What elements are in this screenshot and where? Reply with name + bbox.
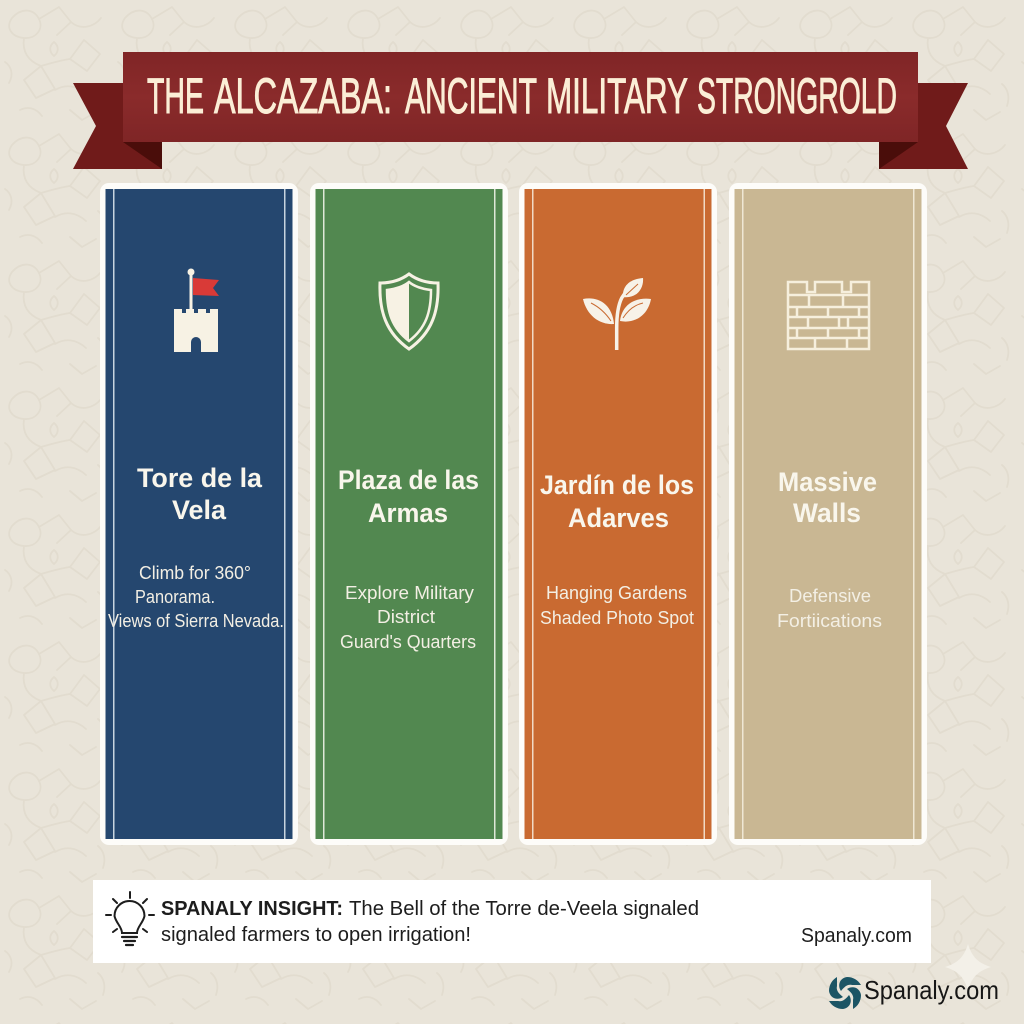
heading: Tore de la Vela: [137, 463, 263, 525]
text: description: Panorama.: [135, 587, 215, 607]
heading: Tore de la Vela: Tore de la: [137, 463, 263, 493]
icon: shield: [380, 274, 438, 349]
title banner: [73, 52, 968, 169]
heading: Jardin de los Adarves: Jardín de los: [540, 470, 694, 500]
text: description: Hanging Gardens: [546, 583, 687, 603]
text: description: District: [377, 607, 435, 627]
icon: logo swirl: [829, 977, 861, 1009]
text: description: [540, 583, 694, 628]
text: insight: signaled farmers to open irrigation!: [161, 924, 471, 946]
left ribbon tail: [73, 83, 162, 169]
heading: Massive Walls: Walls: [793, 498, 861, 528]
text: description: Explore Military: [345, 583, 474, 603]
text: description: [108, 563, 284, 631]
text: description: Views of Sierra Nevada.: [108, 611, 284, 631]
panel: Massive Walls: [729, 183, 927, 845]
heading: Plaza de las Armas: Plaza de las: [338, 465, 479, 495]
panel: Plaza de las Armas: [310, 183, 508, 845]
banner body: [123, 52, 918, 142]
heading: Jardin de los Adarves: [540, 470, 694, 533]
panel: insight callout: [93, 880, 931, 963]
icon: brick wall: [788, 282, 869, 349]
text: description: [340, 583, 476, 652]
icon: castle tower with flag: [174, 268, 219, 352]
icon: sprout with leaves: [583, 278, 651, 350]
text: insight: [161, 898, 699, 946]
text: insight: SPANALY INSIGHT:: [161, 898, 343, 920]
right ribbon tail: [879, 83, 968, 169]
icon: sparkle: [945, 944, 991, 990]
text: description: [777, 586, 882, 631]
text: logo wordmark: Spanaly.com: [864, 975, 999, 1005]
heading: Massive Walls: [778, 467, 877, 528]
title text: THE: [147, 68, 204, 124]
heading: Massive Walls: Massive: [778, 467, 877, 497]
heading: Jardin de los Adarves: Adarves: [568, 503, 669, 533]
title text: ALCAZABA:: [214, 68, 392, 124]
text: description: Guard's Quarters: [340, 632, 476, 652]
text: source: Spanaly.com: [801, 925, 912, 947]
icon: light bulb: [106, 892, 154, 945]
title text: ANCIENT: [405, 68, 537, 124]
text: description: Shaded Photo Spot: [540, 608, 694, 628]
heading: Plaza de las Armas: [338, 465, 479, 528]
text: description: Climb for 360°: [139, 563, 251, 583]
panel: Torre de la Vela: [100, 183, 298, 845]
text: description: Fortiications: [777, 611, 882, 631]
text: insight: The Bell of the Torre de-Veela signaled: [349, 898, 699, 920]
text: description: Defensive: [789, 586, 871, 606]
heading: Plaza de las Armas: Armas: [368, 498, 448, 528]
logo: Spanaly.com: [829, 975, 999, 1009]
title text: [147, 68, 897, 124]
heading: Tore de la Vela: Vela: [172, 495, 227, 525]
panel: Jardin de los Adarves: [519, 183, 717, 845]
title text: MILITARY: [546, 68, 688, 124]
